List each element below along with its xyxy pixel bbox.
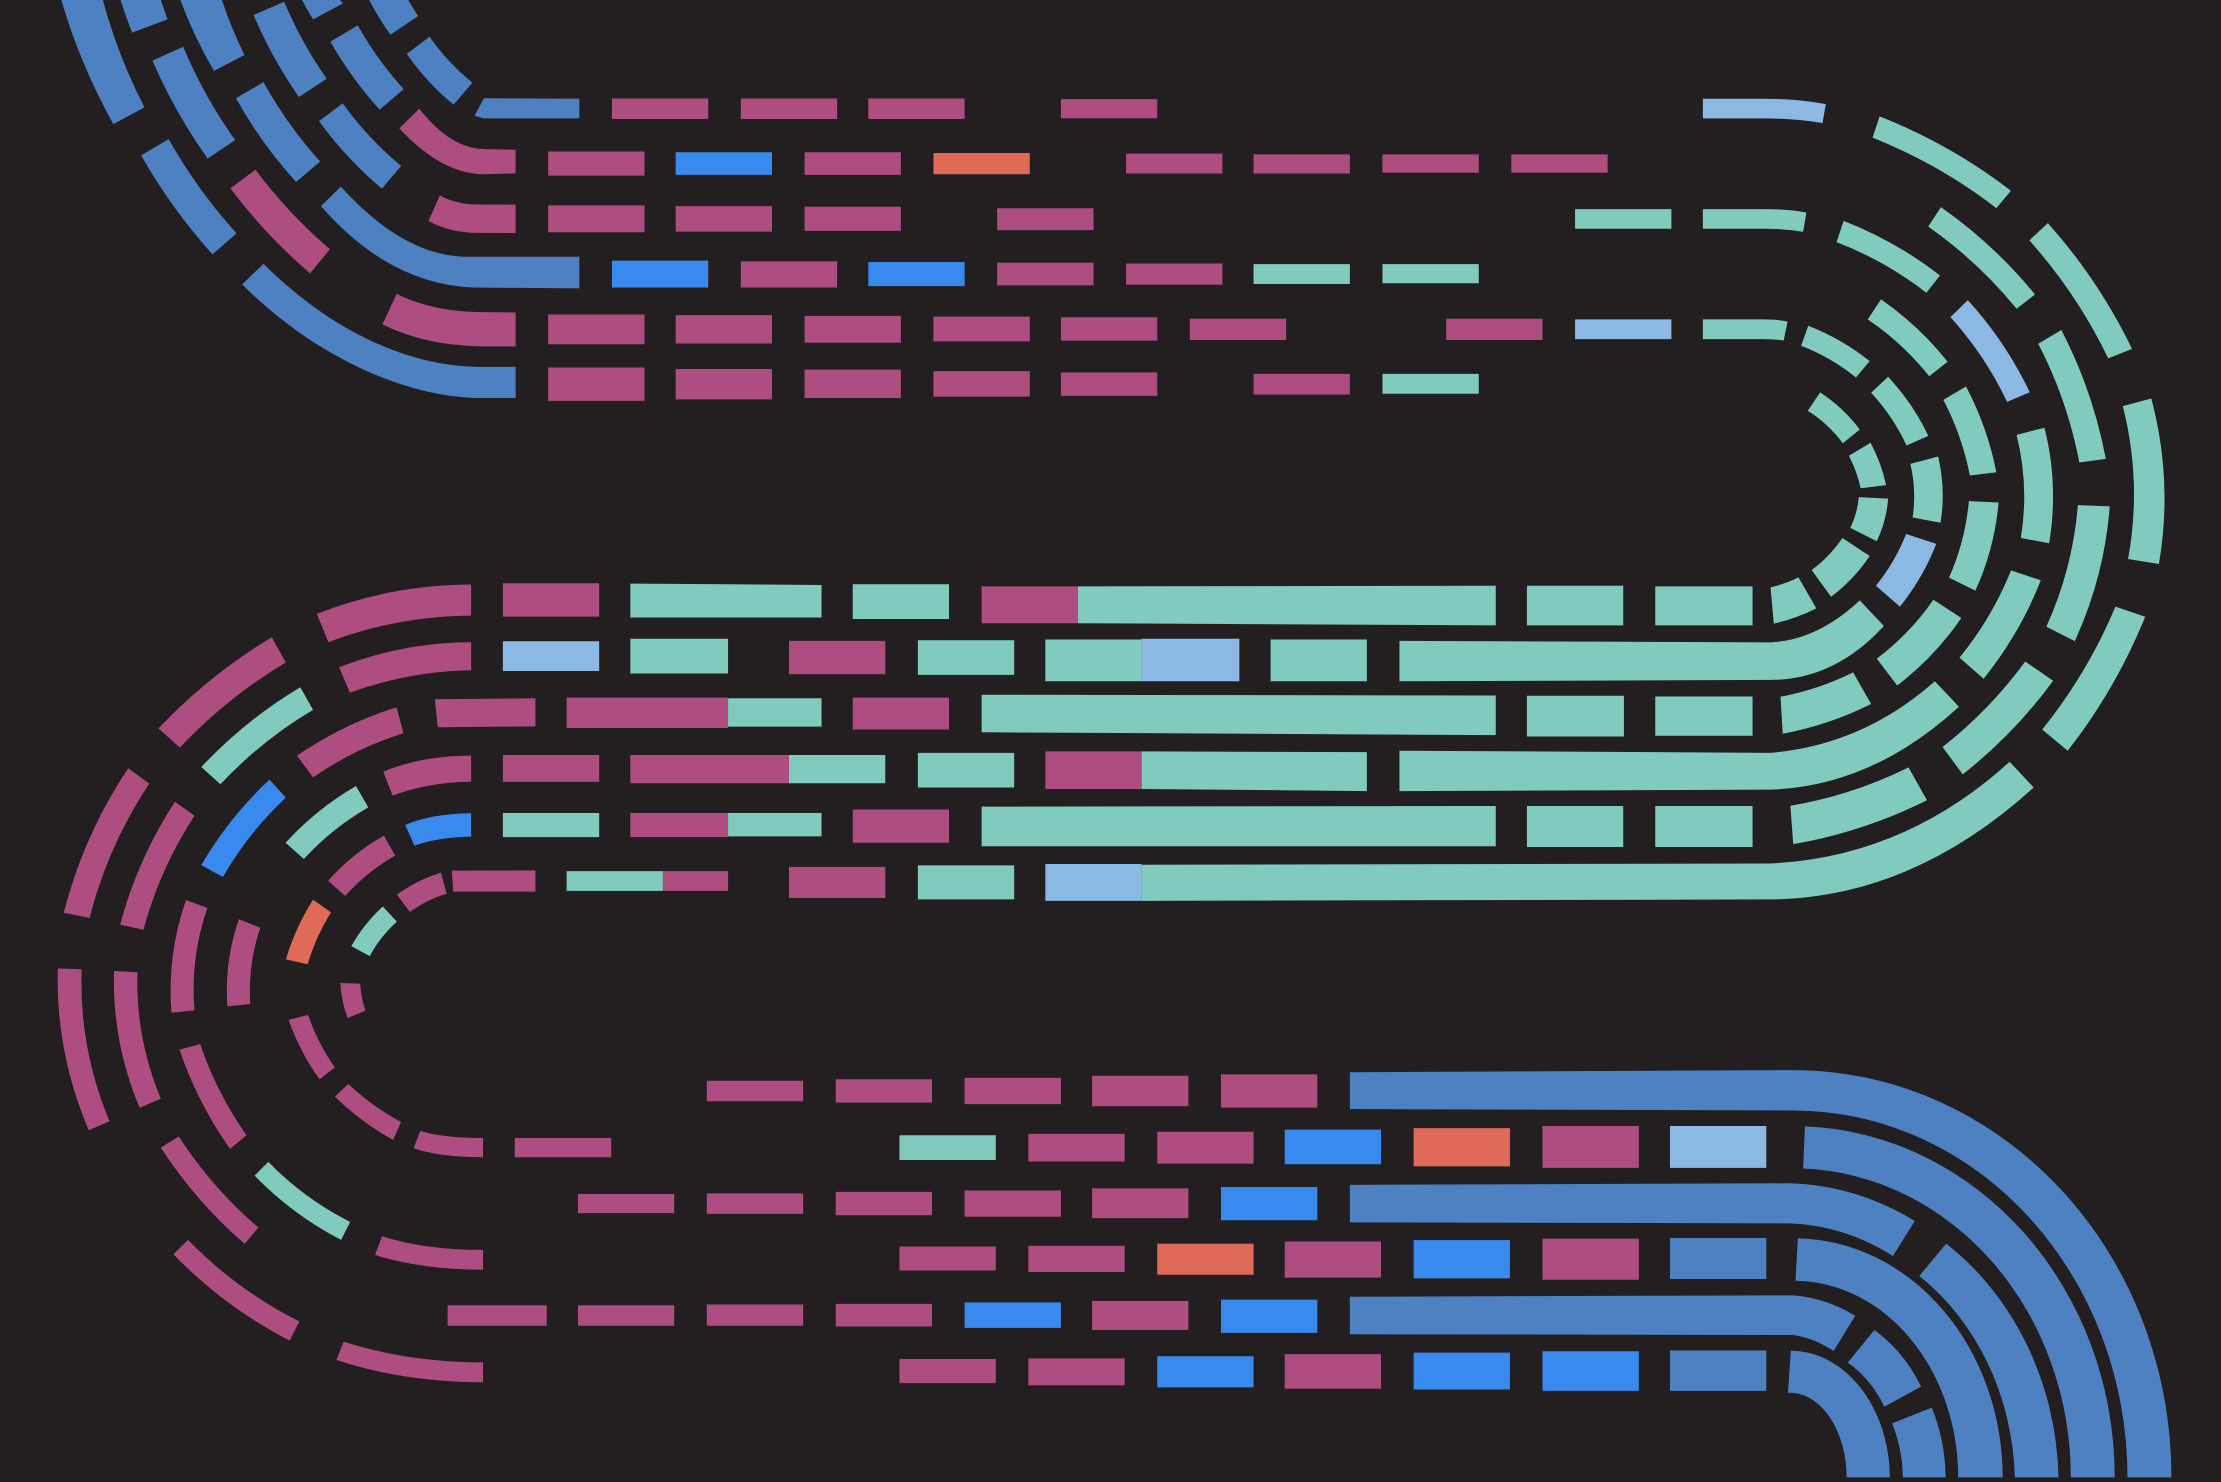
middle row 2 dashes <box>503 600 1884 681</box>
row 3 dashes <box>548 205 1806 232</box>
row 1 dashes <box>475 98 1826 123</box>
bottom row 4 dashes <box>899 1238 2003 1477</box>
row 4 dashes <box>612 261 1479 288</box>
bottom row 2 dashes <box>899 1126 2115 1477</box>
bottom row 6 dashes <box>899 1351 1890 1477</box>
middle row 5 dashes <box>503 806 1753 847</box>
middle row 1 dashes <box>503 583 1753 625</box>
left-hand turn: concentric arc dashes <box>58 585 483 1382</box>
row 2 dashes <box>548 152 1608 176</box>
right-hand turn: concentric arc dashes <box>1771 116 2164 844</box>
middle row 3 dashes <box>435 695 1753 737</box>
middle row 4 dashes <box>503 681 1959 791</box>
top-left curved ribbons <box>61 0 579 398</box>
middle row 6 dashes <box>452 762 2034 901</box>
bottom row 5 dashes <box>448 1295 1946 1477</box>
bottom row 3 dashes <box>578 1183 2059 1477</box>
row 5 dashes <box>548 314 1788 344</box>
bottom row 1 dashes <box>707 1070 2171 1477</box>
row 6 dashes <box>548 368 1479 401</box>
lower-left lone dash <box>515 1138 611 1157</box>
